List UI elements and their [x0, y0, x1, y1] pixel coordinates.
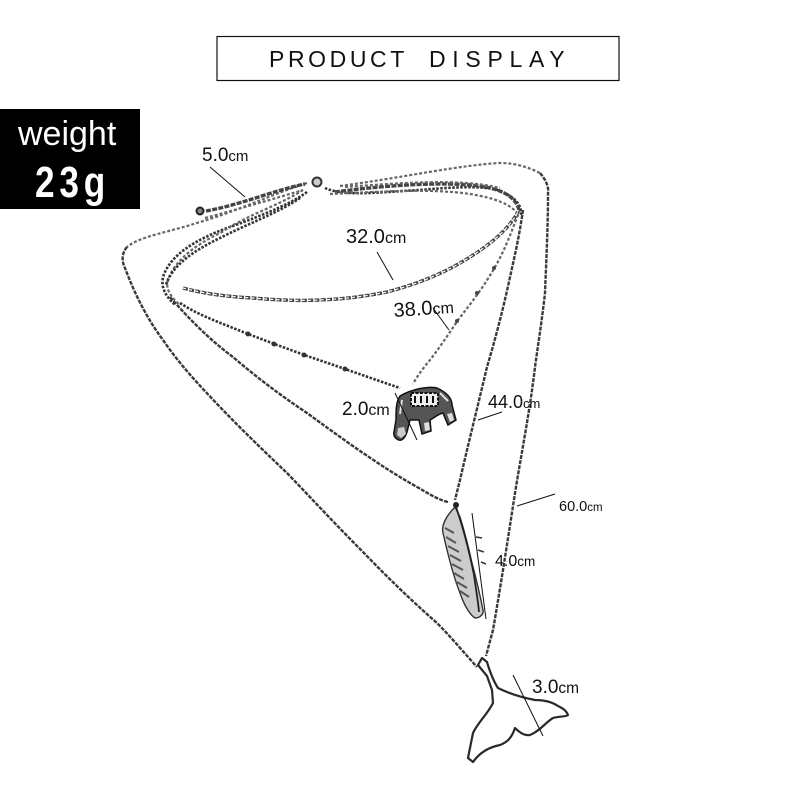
title box: DISPLAY — [429, 46, 571, 72]
icon: feather pendant — [443, 502, 483, 618]
measure label: 4.0cm — [472, 513, 535, 619]
measure label: 2.0cm — [342, 393, 417, 440]
extender chain — [196, 184, 305, 218]
weight badge: weight — [17, 115, 117, 153]
icon: whale tail pendant — [468, 658, 568, 762]
necklace chain: 44cm with feather — [170, 210, 523, 502]
measure label: 5.0cm — [202, 145, 248, 197]
necklace chain: 60cm outer with whale tail — [123, 163, 548, 667]
measure label: 5.0cm: 5.0cm — [202, 145, 248, 166]
measure label: 32.0cm: 32.0cm — [346, 226, 406, 248]
chain bundle: back strands and clasp — [162, 178, 521, 305]
necklace chain: 38cm with elephant — [180, 210, 520, 388]
measure label: 3.0cm — [513, 675, 579, 736]
weight badge — [0, 109, 140, 209]
weight badge: 23g — [35, 158, 110, 207]
necklace chain: 32cm — [183, 212, 518, 300]
measure label: 32.0cm — [346, 226, 406, 280]
title box — [217, 36, 619, 80]
title box: PRODUCT — [269, 46, 408, 72]
measure label: 60.0cm — [517, 494, 603, 515]
measure label: 44.0cm — [478, 392, 540, 420]
measure label: 38.0cm: 38.0cm — [393, 296, 454, 322]
measure label: 4.0cm: 4.0cm — [495, 553, 535, 570]
icon: elephant pendant — [394, 387, 456, 440]
measure label: 44.0cm: 44.0cm — [488, 392, 540, 412]
measure label: 2.0cm: 2.0cm — [342, 399, 390, 420]
measure label: 60.0cm: 60.0cm — [559, 499, 603, 515]
measure label: 3.0cm: 3.0cm — [532, 677, 579, 698]
